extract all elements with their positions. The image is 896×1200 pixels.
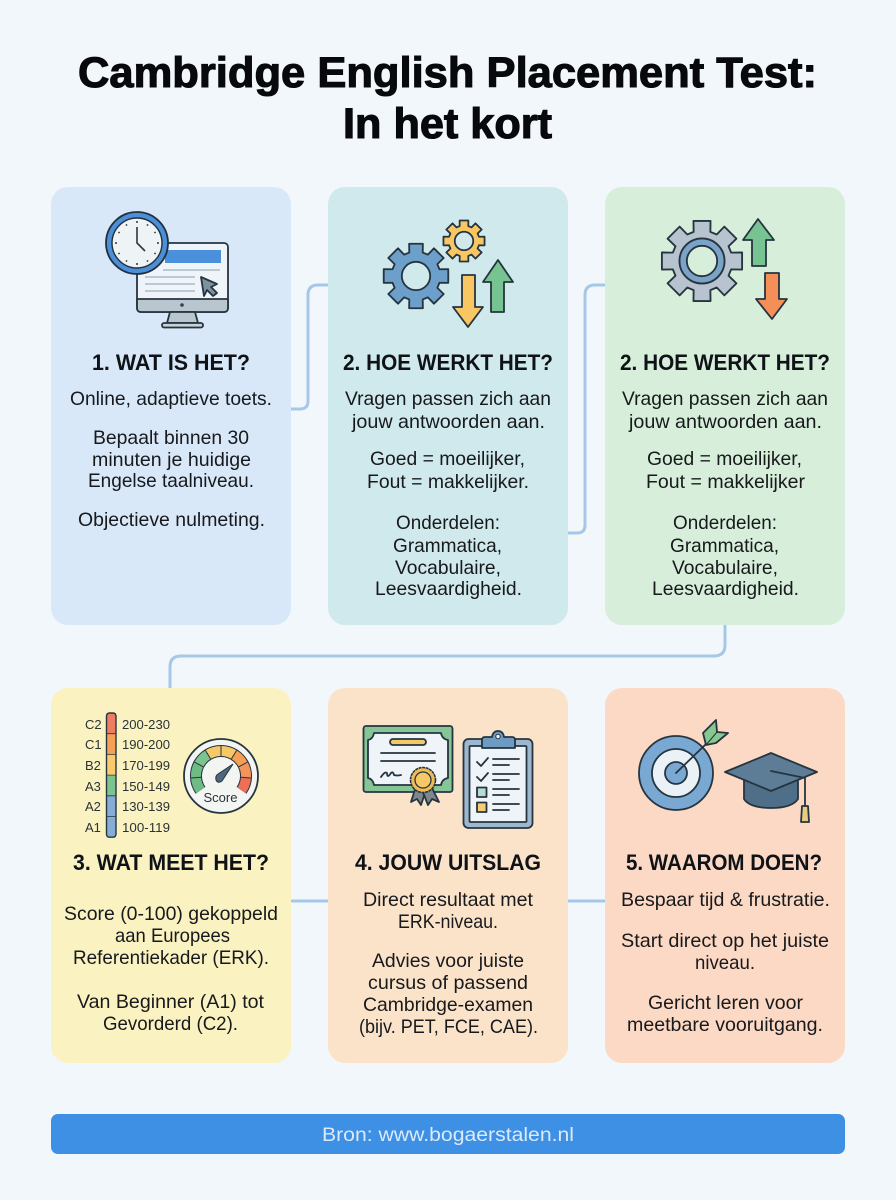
text block: minuten je huidige	[92, 449, 251, 471]
chart: level scale: A2	[85, 799, 101, 814]
text block: jouw antwoorden aan.	[351, 411, 545, 433]
arrow: connector 3 to 4	[170, 625, 725, 688]
chart: level scale: 190-200	[122, 737, 170, 752]
text block: Cambridge-examen	[363, 994, 533, 1016]
text block	[345, 388, 551, 600]
text block: Vragen passen zich aan	[622, 388, 828, 410]
text block: Gevorderd (C2).	[103, 1013, 238, 1035]
text block: Gericht leren voor	[648, 992, 804, 1014]
icon: target with arrow	[639, 720, 728, 810]
chart: level scale: 200-230	[122, 717, 170, 732]
panel: waarom doen	[605, 688, 845, 1063]
heading: 2. HOE WERKT HET?	[343, 350, 553, 375]
chart: level scale: A1	[85, 820, 101, 835]
text block: Van Beginner (A1) tot	[77, 991, 265, 1013]
text block: Advies voor juiste	[372, 950, 524, 972]
text block: Goed = moeilijker,	[370, 448, 525, 470]
panel: wat meet het	[51, 688, 291, 1063]
text block: jouw antwoorden aan.	[628, 411, 822, 433]
heading: 2. HOE WERKT HET?	[620, 350, 830, 375]
text block: Vocabulaire,	[395, 557, 501, 579]
footer: source bar: Bron: www.bogaerstalen.nl	[322, 1125, 574, 1146]
icon: clipboard	[464, 731, 532, 828]
chart: level scale: C1	[85, 737, 102, 752]
heading: 1. WAT IS HET?	[92, 350, 250, 375]
title: In het kort	[343, 100, 552, 148]
title	[78, 49, 817, 148]
text block: Vragen passen zich aan	[345, 388, 551, 410]
icon: graduation cap	[725, 753, 817, 822]
icon: certificate	[364, 726, 452, 805]
chart: level scale	[85, 713, 170, 837]
text block	[359, 889, 538, 1038]
text block	[64, 903, 278, 1035]
text block: Vocabulaire,	[672, 557, 778, 579]
chart: level scale: C2	[85, 717, 102, 732]
text block: Grammatica,	[670, 535, 779, 557]
text block: Referentiekader (ERK).	[73, 947, 269, 969]
text block: Leesvaardigheid.	[652, 578, 799, 600]
footer: source bar	[51, 1114, 845, 1154]
text block: Grammatica,	[393, 535, 502, 557]
panel: hoe werkt het (2)	[605, 187, 845, 625]
heading: 5. WAAROM DOEN?	[626, 850, 822, 875]
text block: Objectieve nulmeting.	[78, 509, 265, 531]
arrow: connector 1 to 2	[291, 285, 328, 409]
text block: Score (0-100) gekoppeld	[64, 903, 278, 925]
text block: cursus of passend	[368, 972, 528, 994]
arrow: connector 5 to 6	[568, 900, 605, 902]
text block: niveau.	[695, 952, 755, 974]
text block: Fout = makkelijker	[646, 471, 806, 493]
text block: meetbare vooruitgang.	[627, 1014, 823, 1036]
arrow: connector 4 to 5	[291, 900, 328, 902]
text block	[621, 889, 830, 1036]
text block: Start direct op het juiste	[621, 930, 829, 952]
text block: Engelse taalniveau.	[88, 470, 254, 492]
text block: Online, adaptieve toets.	[70, 388, 272, 410]
chart: level scale: 150-149	[122, 779, 170, 794]
chart: score gauge: Score	[204, 790, 237, 805]
panel: hoe werkt het (1)	[328, 187, 568, 625]
heading: 4. JOUW UITSLAG	[355, 850, 541, 875]
text block: Bespaar tijd & frustratie.	[621, 889, 830, 911]
chart: level scale: B2	[85, 758, 101, 773]
text block: (bijv. PET, FCE, CAE).	[359, 1016, 538, 1038]
text block: Bepaalt binnen 30	[93, 427, 249, 449]
text block: Leesvaardigheid.	[375, 578, 522, 600]
text block	[70, 388, 272, 531]
icon: monitor and clock	[106, 212, 228, 328]
text block: aan Europees	[115, 925, 230, 947]
icon: gears and arrows	[384, 220, 513, 327]
chart: score gauge	[184, 739, 258, 813]
text block: Onderdelen:	[396, 512, 500, 534]
panel: wat is het	[51, 187, 291, 625]
arrow: connector 2 to 3	[568, 285, 605, 533]
title: Cambridge English Placement Test:	[78, 49, 817, 97]
chart: level scale: 100-119	[122, 820, 170, 835]
text block: ERK-niveau.	[398, 911, 498, 933]
text block	[622, 388, 828, 600]
text block: Direct resultaat met	[363, 889, 534, 911]
panel: jouw uitslag	[328, 688, 568, 1063]
icon: gear and arrows	[662, 219, 787, 319]
text block: Goed = moeilijker,	[647, 448, 802, 470]
chart: level scale: A3	[85, 779, 101, 794]
text block: Fout = makkelijker.	[367, 471, 529, 493]
text block: Onderdelen:	[673, 512, 777, 534]
heading: 3. WAT MEET HET?	[73, 850, 269, 875]
chart: level scale: 130-139	[122, 799, 170, 814]
chart: level scale: 170-199	[122, 758, 170, 773]
